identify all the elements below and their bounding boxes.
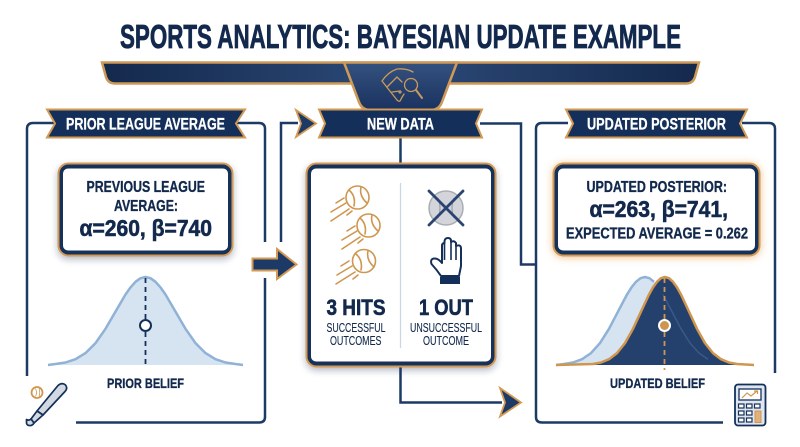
card: updated posterior: EXPECTED AVERAGE = 0.262 <box>566 226 748 242</box>
banner: updated posterior: UPDATED POSTERIOR <box>587 114 726 134</box>
card: previous league average: α=260, β=740 <box>80 215 212 241</box>
connector: prior to new data <box>281 110 316 242</box>
label: updated belief: UPDATED BELIEF <box>610 375 705 391</box>
chart: updated belief curves <box>556 277 754 370</box>
panel: posterior frame <box>536 123 775 422</box>
card: updated posterior <box>554 164 760 256</box>
card: updated posterior: UPDATED POSTERIOR: <box>586 179 727 196</box>
stat: 1 out: UNSUCCESSFUL <box>410 321 482 335</box>
card: previous league average: AVERAGE: <box>114 198 178 215</box>
icon: stop hand <box>431 238 461 284</box>
icon: calculator <box>735 384 766 426</box>
stat: 3 hits: OUTCOMES <box>330 334 382 348</box>
banner: updated posterior <box>566 110 747 138</box>
banner: prior league average: PRIOR LEAGUE AVERAGE <box>66 114 225 134</box>
panel: prior frame <box>27 123 265 422</box>
stat: 3 hits: SUCCESSFUL <box>326 321 386 335</box>
chart: prior belief curve <box>48 277 243 365</box>
connector: new data to updated belief <box>400 367 521 416</box>
label: prior belief: PRIOR BELIEF <box>107 375 184 391</box>
icon: baseball field with magnifier <box>382 69 422 101</box>
card: previous league average: PREVIOUS LEAGUE <box>86 179 205 196</box>
connector: new data to posterior <box>480 124 536 264</box>
banner: prior league average <box>47 110 245 138</box>
card: updated posterior: α=263, β=741, <box>590 196 728 222</box>
stat: 1 out: 1 OUT <box>419 295 473 320</box>
stat: 3 hits <box>326 295 386 348</box>
icon: crossed-out baseball <box>429 191 463 225</box>
icon: three flying baseballs <box>331 186 380 284</box>
icon: baseball and bat <box>26 384 67 426</box>
banner: new data <box>319 110 482 138</box>
stat: 3 hits: 3 HITS <box>326 295 386 320</box>
card: previous league average <box>58 164 232 256</box>
arrow: prior to new data <box>252 249 296 279</box>
stat: 1 out: OUTCOME <box>423 334 469 348</box>
stat: 1 out <box>410 295 482 348</box>
header ribbon <box>102 62 699 110</box>
card: new data <box>306 164 496 366</box>
banner: new data: NEW DATA <box>367 114 434 134</box>
connector: banner to data card <box>399 137 402 164</box>
